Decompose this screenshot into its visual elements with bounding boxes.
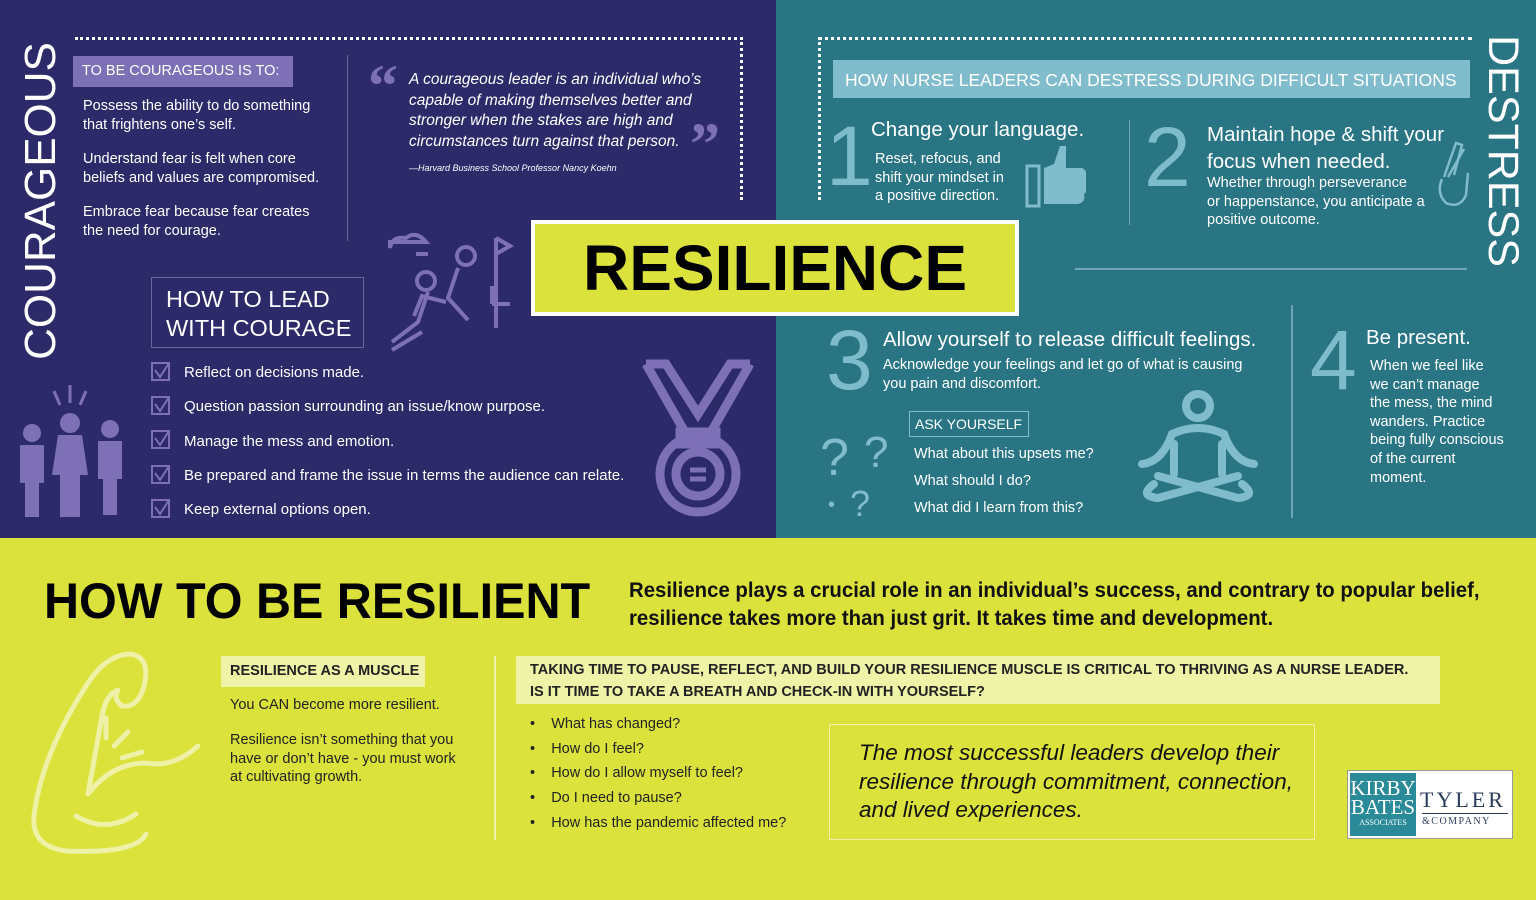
checklist: Manage the mess and emotion.: [184, 433, 394, 450]
heading: how to lead with courage: [166, 286, 351, 341]
bullet list: • What has changed?: [530, 716, 680, 732]
bullet list: • How has the pandemic affected me?: [530, 815, 786, 831]
text: courageous traits: [83, 98, 319, 239]
icon: question marks: ?: [850, 483, 870, 524]
questions: [914, 446, 1094, 516]
panel: courageous: [0, 0, 776, 538]
step 1: a positive direction.: [875, 188, 999, 204]
quote: —Harvard Business School Professor Nancy Koehn: [409, 163, 617, 173]
callout: quote: The most successful leaders develop their: [859, 740, 1279, 765]
intro text: Resilience plays a crucial role in an individual’s success, and contrary to popular belief,: [629, 579, 1480, 602]
callout: quote: [829, 724, 1315, 840]
bullet list: [530, 716, 786, 831]
quote: capable of making themselves better and: [409, 92, 692, 109]
text: courageous traits: that frightens one’s self.: [83, 117, 236, 133]
questions: What did I learn from this?: [914, 500, 1083, 516]
step 2: Maintain hope & shift your: [1207, 123, 1444, 146]
header: how nurse leaders can destress: [833, 60, 1470, 98]
logo: TYLER: [1420, 787, 1506, 812]
step 1: Reset, refocus, and: [875, 151, 1001, 167]
step 2: 2: [1144, 110, 1191, 204]
icon: crossed fingers: [1438, 141, 1470, 206]
step 3: Acknowledge your feelings and let go of what is causing: [883, 357, 1242, 373]
quote: circumstances turn against that person.: [409, 133, 680, 150]
callout: quote: and lived experiences.: [859, 797, 1083, 822]
title box: resilience: RESILIENCE: [583, 232, 967, 304]
step 1: [826, 109, 1086, 208]
icon: question marks: ?: [820, 429, 849, 487]
icon: question marks: [820, 428, 888, 524]
bullet list: • How do I feel?: [530, 741, 644, 757]
text: courageous traits: Understand fear is felt when core: [83, 151, 296, 167]
logo: BATES: [1351, 795, 1415, 819]
step 1: shift your mindset in: [875, 170, 1004, 186]
icon: people: [20, 385, 122, 517]
step 4: the mess, the mind: [1370, 395, 1492, 411]
questions: What should I do?: [914, 473, 1031, 489]
step 2: Whether through perseverance: [1207, 175, 1407, 191]
step 1: Change your language.: [871, 118, 1084, 141]
panel: destress: [776, 0, 1536, 538]
text: muscle: have or don’t have - you must work: [230, 751, 456, 767]
step 2: focus when needed.: [1207, 150, 1390, 173]
icon: question marks: ?: [864, 428, 888, 477]
bullet list: • Do I need to pause?: [530, 790, 682, 806]
panel: how to lead: [151, 277, 364, 348]
label: to be courageous: TO BE COURAGEOUS IS TO:: [82, 63, 279, 79]
label: resilience as a muscle: [221, 656, 425, 687]
checklist: Be prepared and frame the issue in terms the audience can relate.: [184, 467, 624, 484]
vertical title: destress: DESTRESS: [1479, 35, 1527, 267]
step 4: When we feel like: [1370, 358, 1484, 374]
title box: resilience: [531, 220, 1019, 316]
step 4: wanders. Practice: [1370, 414, 1485, 430]
logo: &COMPANY: [1422, 816, 1491, 827]
logo: ASSOCIATES: [1359, 818, 1407, 827]
icon: meditation: [1138, 390, 1258, 502]
ask yourself: [909, 411, 1029, 437]
icon: open quote: “: [368, 53, 398, 119]
step 4: of the current: [1370, 451, 1455, 467]
icon: thumbs up: [1026, 146, 1086, 208]
text: courageous traits: the need for courage.: [83, 223, 221, 239]
checklist: Question passion surrounding an issue/know purpose.: [184, 398, 545, 415]
questions: What about this upsets me?: [914, 446, 1094, 462]
checklist: Keep external options open.: [184, 501, 371, 518]
step 2: [1144, 110, 1470, 228]
quote: A courageous leader is an individual who’s: [409, 71, 701, 88]
vertical title: courageous: COURAGEOUS: [16, 42, 65, 360]
step 4: moment.: [1370, 470, 1426, 486]
label: resilience as a muscle: RESILIENCE AS A MUSCLE: [230, 663, 419, 679]
step 3: [826, 313, 1256, 407]
text: muscle: Resilience isn’t something that you: [230, 732, 453, 748]
bullet list: • How do I allow myself to feel?: [530, 765, 743, 781]
logo: [1347, 770, 1513, 839]
step 4: we can’t manage: [1370, 377, 1480, 393]
icon: medal: [642, 360, 754, 516]
intro text: [629, 579, 1480, 630]
header: how nurse leaders can destress: HOW NURSE LEADERS CAN DESTRESS DURING DIFFICULT SITUATIONS: [845, 70, 1457, 90]
text: courageous traits: Possess the ability to do something: [83, 98, 310, 114]
step 1: 1: [826, 109, 873, 203]
step 3: Allow yourself to release difficult feelings.: [883, 328, 1256, 351]
icon: flexed arm: [31, 652, 200, 854]
header: taking time to pause: IS IT TIME TO TAKE A BREATH AND CHECK-IN WITH YOURSELF?: [530, 684, 985, 700]
step 2: positive outcome.: [1207, 212, 1320, 228]
step 3: 3: [826, 313, 873, 407]
step 3: you pain and discomfort.: [883, 376, 1041, 392]
quote: [368, 53, 720, 177]
step 4: Be present.: [1366, 326, 1471, 349]
intro text: resilience takes more than just grit. It takes time and development.: [629, 607, 1273, 630]
checklist: [151, 362, 624, 518]
checklist: Reflect on decisions made.: [184, 364, 364, 381]
heading: how to be resilient: HOW TO BE RESILIENT: [44, 573, 590, 629]
text: muscle: You CAN become more resilient.: [230, 697, 440, 713]
heading: how to lead with courage: HOW TO LEAD: [166, 286, 330, 312]
icon: close quote: ”: [690, 111, 720, 177]
step 4: being fully conscious: [1370, 432, 1504, 448]
icon: climbers: [388, 232, 514, 352]
text: courageous traits: Embrace fear because fear creates: [83, 204, 309, 220]
text: muscle: [230, 697, 456, 785]
quote: stronger when the stakes are high and: [409, 112, 673, 129]
header: taking time to pause: [516, 656, 1440, 704]
icon: question marks: •: [828, 494, 835, 516]
logo: KIRBY: [1350, 776, 1416, 800]
step 4: 4: [1310, 313, 1357, 407]
text: muscle: at cultivating growth.: [230, 769, 362, 785]
text: courageous traits: beliefs and values are compromised.: [83, 170, 319, 186]
step 2: or happenstance, you anticipate a: [1207, 194, 1425, 210]
ask yourself: ASK YOURSELF: [915, 416, 1022, 432]
label: to be courageous: [73, 56, 293, 87]
header: taking time to pause: TAKING TIME TO PAUSE, REFLECT, AND BUILD YOUR RESILIENCE MUSCLE IS CRITICAL TO THRIVING AS A NURSE LEADER.: [530, 662, 1408, 678]
heading: how to lead with courage: WITH COURAGE: [166, 315, 351, 341]
step 4: [1310, 313, 1504, 486]
callout: quote: resilience through commitment, connection,: [859, 769, 1293, 794]
